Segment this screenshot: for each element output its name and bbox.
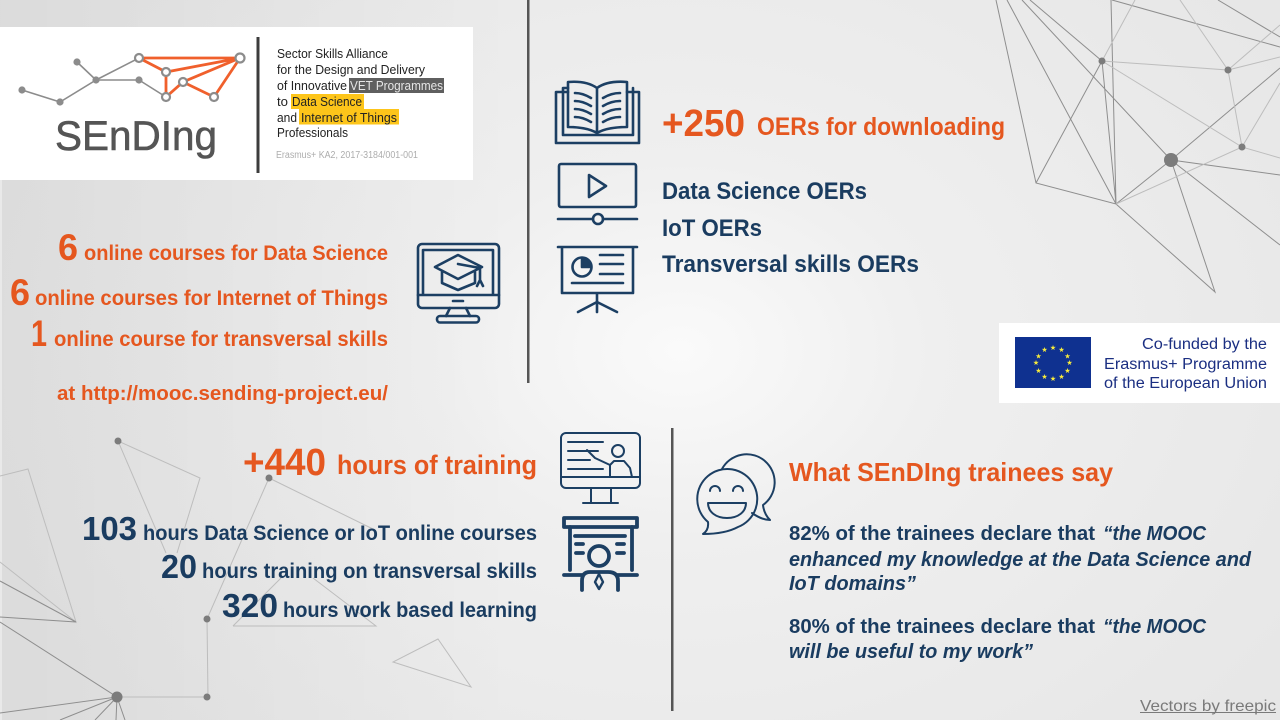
- EU text: Co-funded by the: [1142, 336, 1267, 353]
- EU text: Erasmus+ Programme: [1104, 356, 1267, 373]
- hours breakdown: [82, 510, 537, 624]
- EU flag: ★: [1058, 346, 1065, 354]
- icon: smiling speech bubbles: [697, 454, 775, 534]
- OER categories: Transversal skills OERs: [662, 251, 919, 278]
- logo wordmark: SEnDIng: [55, 112, 217, 159]
- quote 80 percent: 80% of the trainees declare that: [789, 616, 1095, 638]
- course count lines: [10, 227, 388, 354]
- panel: trainee feedback: [697, 454, 1252, 663]
- hours breakdown: hours training on transversal skills: [202, 560, 537, 583]
- course count lines: 1: [31, 313, 47, 354]
- logo tagline: of Innovative: [277, 79, 347, 93]
- hours breakdown: hours work based learning: [283, 599, 537, 622]
- EU flag: ★: [1041, 346, 1048, 354]
- OER categories: IoT OERs: [662, 215, 762, 242]
- EU flag: ★: [1066, 359, 1073, 367]
- +250 OERs heading: [662, 103, 1005, 145]
- EU text: [1104, 336, 1267, 392]
- quote 80 percent: [789, 616, 1207, 663]
- logo tagline: Sector Skills Alliance: [277, 47, 388, 61]
- SEnDIng logo panel: [0, 27, 473, 180]
- +440 heading: +440: [243, 442, 326, 484]
- EU flag: ★: [1064, 352, 1071, 360]
- +440 heading: [243, 442, 537, 484]
- EU flag: ★: [1050, 344, 1056, 352]
- logo tagline: Internet of Things: [301, 111, 397, 125]
- logo tagline: Professionals: [277, 126, 348, 140]
- OER categories: Data Science OERs: [662, 178, 867, 205]
- icon: video player: [558, 164, 637, 224]
- quote 82 percent: 82% of the trainees declare that: [789, 523, 1095, 545]
- icon: open book: [556, 82, 639, 143]
- panel: OERs: [556, 82, 1005, 312]
- course count lines: 6: [58, 227, 78, 268]
- OER categories: [662, 178, 919, 278]
- network pattern bottom left: [0, 438, 471, 720]
- MOOC url: at http://mooc.sending-project.eu/: [57, 382, 388, 405]
- hours breakdown: 20: [161, 548, 197, 585]
- icon: monitor with graduation cap: [418, 244, 499, 322]
- quote 82 percent: enhanced my knowledge at the Data Science and: [789, 549, 1252, 571]
- EU flag: [1015, 337, 1091, 388]
- EU co-funded panel: [999, 323, 1280, 403]
- logo tagline: Data Science: [292, 95, 362, 109]
- EU flag: ★: [1041, 373, 1048, 381]
- panel: online courses: [10, 227, 388, 405]
- EU flag: ★: [1035, 352, 1042, 360]
- EU text: of the European Union: [1104, 375, 1267, 392]
- feedback heading: What SEnDIng trainees say: [789, 457, 1114, 487]
- +440 heading: hours of training: [337, 450, 537, 480]
- quote 82 percent: “the MOOC: [1103, 523, 1207, 545]
- +250 OERs heading: +250: [662, 103, 745, 145]
- logo tagline: VET Programmes: [350, 79, 443, 93]
- course count lines: online courses for Internet of Things: [35, 287, 388, 310]
- icon: presenter at board: [564, 518, 637, 590]
- logo tagline: [276, 47, 444, 161]
- quote 80 percent: will be useful to my work”: [789, 641, 1033, 663]
- hours breakdown: hours Data Science or IoT online courses: [143, 522, 537, 545]
- network pattern top right: [996, 0, 1280, 292]
- course count lines: online course for transversal skills: [54, 328, 388, 351]
- EU flag: ★: [1035, 367, 1042, 375]
- course count lines: 6: [10, 272, 30, 313]
- +250 OERs heading: OERs for downloading: [757, 113, 1005, 141]
- logo network graphic: [18, 54, 245, 106]
- EU flag: ★: [1033, 359, 1039, 367]
- EU flag: ★: [1064, 367, 1071, 375]
- panel: hours of training: [82, 442, 537, 624]
- icon: online trainer monitor: [561, 433, 640, 503]
- EU flag: ★: [1058, 373, 1065, 381]
- quote 82 percent: IoT domains”: [789, 573, 916, 595]
- quote 80 percent: “the MOOC: [1103, 616, 1207, 638]
- logo tagline: to: [277, 95, 288, 109]
- hours breakdown: 320: [222, 587, 278, 624]
- hours breakdown: 103: [82, 510, 137, 547]
- logo tagline: and: [277, 111, 297, 125]
- course count lines: online courses for Data Science: [84, 242, 388, 265]
- icon: presentation board: [558, 247, 637, 312]
- vertical divider bottom: [671, 428, 674, 711]
- EU flag: ★: [1050, 375, 1056, 383]
- logo tagline: Erasmus+ KA2, 2017-3184/001-001: [276, 150, 418, 161]
- credit: Vectors by freepic: [1140, 698, 1276, 715]
- logo tagline: for the Design and Delivery: [277, 63, 426, 77]
- quote 82 percent: [789, 523, 1252, 595]
- vertical divider top: [527, 0, 530, 383]
